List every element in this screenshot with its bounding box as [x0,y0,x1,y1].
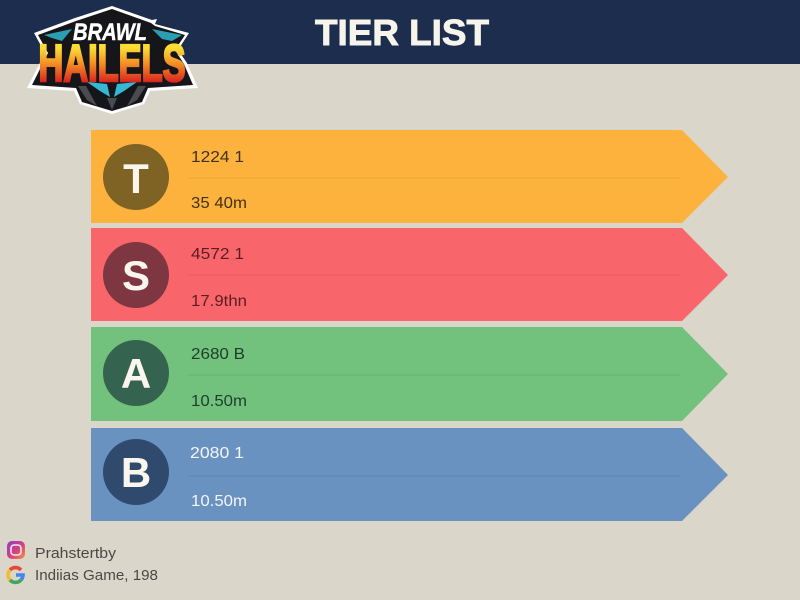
B value top: 2080 1 [190,445,244,462]
B value bottom: 10.50m [191,493,247,510]
header band [0,0,800,64]
footer line 1: Prahstertby [35,545,117,562]
tier T row: T [123,155,149,202]
T value top: 1224 1 [191,149,244,166]
T value bottom: 35 40m [191,195,247,212]
S value top: 4572 1 [191,246,244,263]
tier S row: S [122,252,150,299]
badge A [103,340,169,406]
badge S [103,242,169,308]
icon: Instagram [7,541,25,559]
icon: Google [8,568,23,582]
tier A row [91,327,728,421]
badge B [103,439,169,505]
A value bottom: 10.50m [191,393,247,410]
tier T row [91,130,728,223]
tier B row: B [121,449,151,496]
tier B row [91,428,728,521]
tier A row: A [121,350,151,397]
badge T [103,144,169,210]
logo word: Brawl: BRAWL [73,19,147,46]
S value bottom: 17.9thn [191,293,247,310]
logo: Brawl Hailels [27,6,198,114]
A value top: 2680 B [191,346,245,363]
tier S row [91,228,728,321]
footer line 2: Indiias Game, 198 [35,567,158,584]
logo word: Hailels: HAILELS [38,35,186,93]
title: TIER LIST [315,12,489,53]
